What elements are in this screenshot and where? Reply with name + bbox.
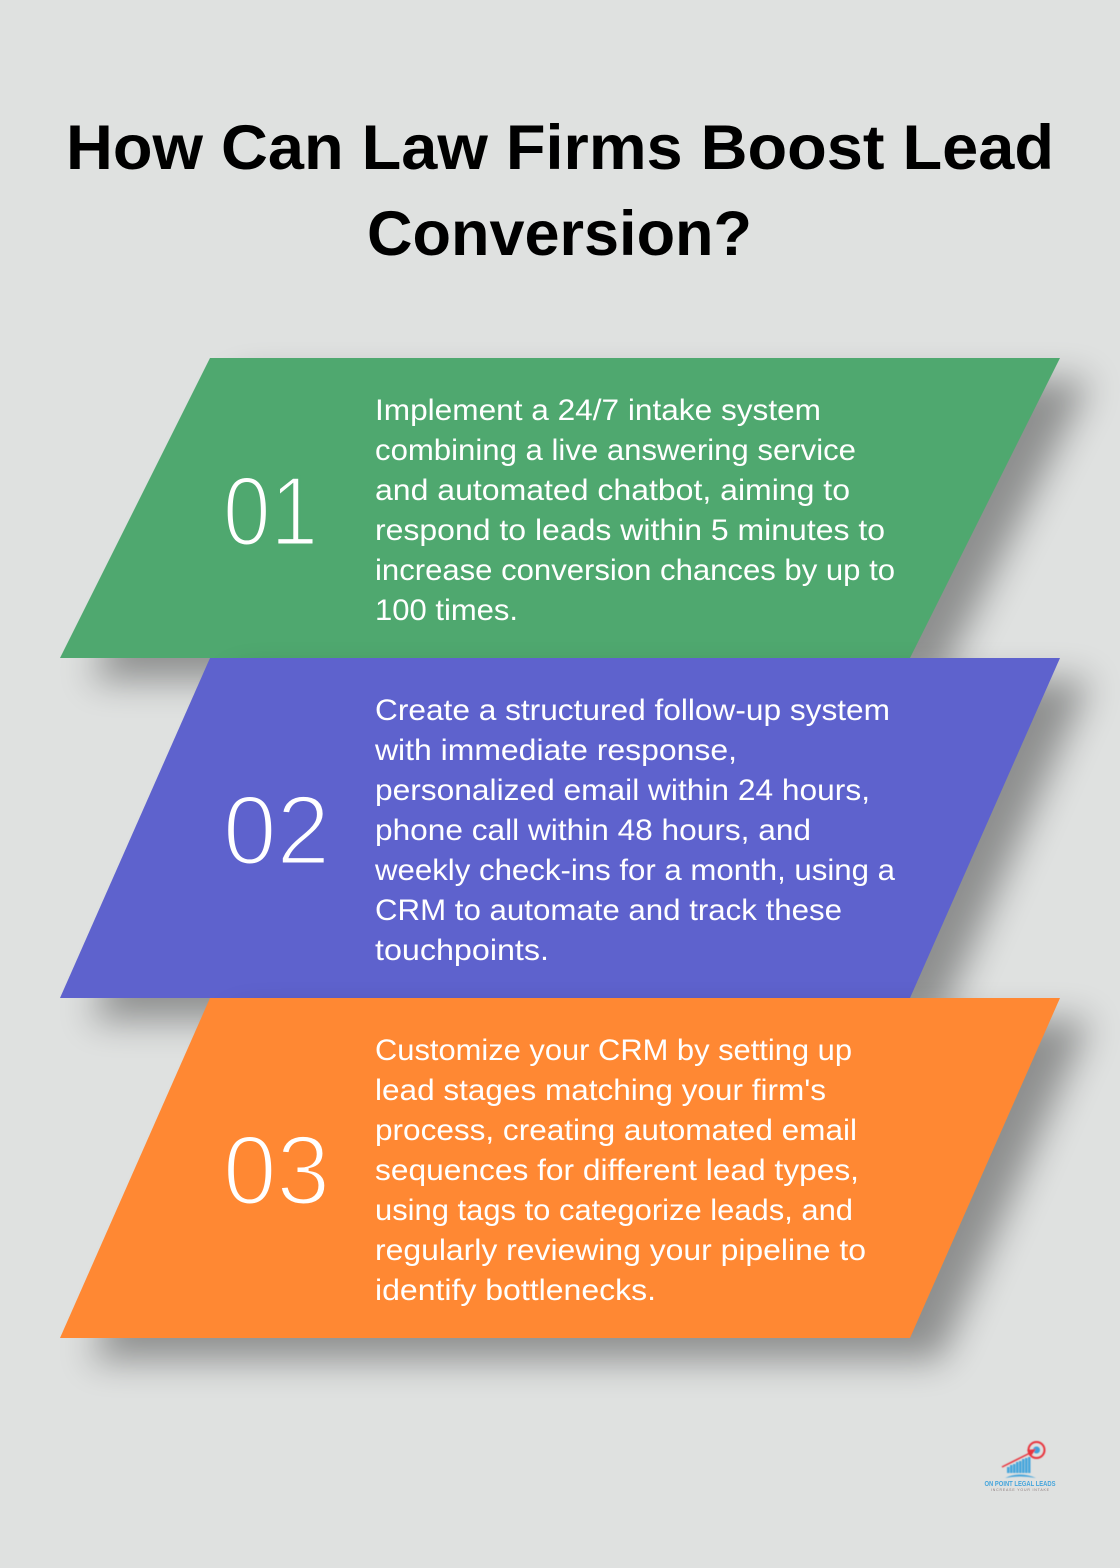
step 2 text [374, 694, 895, 967]
icon: On Point Legal Leads logo [984, 1442, 1056, 1492]
step 3 text: regularly reviewing your pipeline to [375, 1234, 866, 1267]
step 2 text: with immediate response, [374, 734, 737, 767]
step 3 text [375, 1034, 866, 1307]
step 1 text: combining a live answering service [375, 434, 856, 467]
title: How Can Law Firms Boost Lead [66, 113, 1054, 183]
step 3 orange parallelogram [60, 998, 1060, 1338]
step 3 text: process, creating automated email [375, 1114, 857, 1147]
title: Conversion? [367, 199, 752, 269]
icon: On Point Legal Leads logo: ON POINT LEGAL LEADS [984, 1481, 1056, 1488]
step 2 text: CRM to automate and track these [375, 894, 842, 927]
title [66, 113, 1054, 269]
step 3 text: Customize your CRM by setting up [375, 1034, 852, 1067]
step 3 text: using tags to categorize leads, and [375, 1194, 853, 1227]
panel: step 3 [60, 998, 1090, 1360]
step 2 text: Create a structured follow-up system [375, 694, 890, 727]
step 2 text: touchpoints. [375, 934, 549, 967]
step 3 number: 03 [223, 1115, 330, 1225]
step 1 text: Implement a 24/7 intake system [375, 394, 821, 427]
step 1 text: 100 times. [375, 594, 518, 627]
panel: step 1 [60, 358, 1090, 680]
step 1 text: and automated chatbot, aiming to [375, 474, 850, 507]
icon: On Point Legal Leads logo: INCREASE YOUR INTAKE [991, 1488, 1050, 1492]
step 2 purple parallelogram [60, 658, 1060, 998]
step 2 number: 02 [223, 775, 330, 885]
step 3 text: lead stages matching your firm's [375, 1074, 826, 1107]
panel: step 2 [60, 658, 1090, 1020]
step 1 text [375, 394, 895, 627]
step 3 text: sequences for different lead types, [375, 1154, 859, 1187]
step 1 green parallelogram [60, 358, 1060, 658]
step 2 text: weekly check-ins for a month, using a [374, 854, 895, 887]
step 1 text: increase conversion chances by up to [375, 554, 895, 587]
step 1 text: respond to leads within 5 minutes to [375, 514, 885, 547]
step 1 number: 01 [223, 456, 318, 566]
step 2 text: phone call within 48 hours, and [375, 814, 811, 847]
step 2 text: personalized email within 24 hours, [375, 774, 870, 807]
step 3 text: identify bottlenecks. [375, 1274, 656, 1307]
